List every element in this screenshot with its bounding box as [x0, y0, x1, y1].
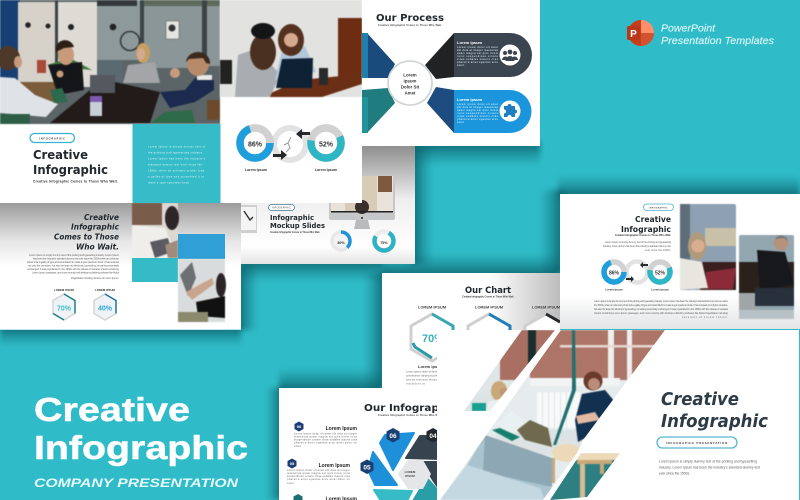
- badge: infographic: [30, 134, 74, 142]
- body text lower: the 1500s, when an unknown printer took a galley of type and scrambled it to make a type specimen book. It has survived not only five centuries,: [594, 303, 728, 307]
- body text: not only five centuries, but also the leap into electronic typesetting, remaining essentially: [28, 264, 120, 268]
- heading: infographic mockup slides: Infographic: [270, 214, 314, 222]
- process arm: blue: [427, 87, 532, 133]
- center hexagon: LOREM: [405, 470, 416, 474]
- donut chart: 30%: 30%: [337, 241, 345, 245]
- process arm: dark: [425, 33, 532, 79]
- process arm: dark: vitae sodales mauris cras: [457, 57, 499, 61]
- list item 05: suspendisse ornare vitae sodales mauris cras: [287, 474, 351, 478]
- heading: our chart: Creative Infographic Comes to Those Who Wait.: [462, 296, 514, 298]
- slide: our process: [362, 0, 540, 146]
- list item 05: pharetra amet egestas arcu amet dolor sit: [287, 477, 350, 481]
- badge: infographic presentation: INFOGRAPHIC PRESENTATION: [666, 441, 728, 445]
- chart: linked donuts: Lorem Ipsum: [651, 288, 669, 292]
- list item 05: Lorem ipsum dolor sit amet elit duis at integer: [287, 468, 350, 472]
- segment: [406, 436, 440, 459]
- list item 05: [287, 458, 351, 485]
- caption: sed do eiusmod tempor: [406, 378, 438, 382]
- process arm: blue: vitae sodales mauris cras: [457, 114, 499, 118]
- label: [661, 24, 774, 47]
- list item 06: pharetra amet egestas arcu amet dolor sit: [294, 440, 357, 444]
- slide: our infographic: [279, 388, 437, 500]
- badge: INFOGRAPHIC: [649, 206, 668, 209]
- stat: 70% hexagon: LOREM IPSUM: [54, 288, 75, 292]
- badge 05: 05: [363, 464, 371, 472]
- chart: 86% and 52% linked donuts: Lorem Ipsum: [315, 168, 337, 172]
- list item 05: 05: [290, 461, 295, 466]
- chart: 86% and 52% linked donuts: Lorem Ipsum: [245, 168, 267, 172]
- body text: ever since the 1500s.: [645, 248, 671, 252]
- icon: puzzle: [500, 100, 520, 122]
- center circle: [388, 61, 432, 105]
- list item 06: amet: [294, 444, 301, 448]
- body text: Lorem Ipsum is simply dummy text of the printing and typesetting: [659, 460, 757, 464]
- heading: our chart: Our Chart: [465, 286, 511, 296]
- body text: Lorem Ipsum is simply dummy text of the printing and typesetting: [605, 240, 672, 244]
- list item 06: maecenas quam magna est quis lorem nunc: [294, 434, 358, 438]
- heading: creative infographic: Creative: [661, 389, 739, 410]
- stat: 40% hexagon: LOREM IPSUM: [95, 288, 116, 292]
- stat: 40% hexagon: [94, 288, 116, 320]
- stat: 70% hexagon: 70%: [57, 306, 72, 312]
- list item 06: [294, 422, 358, 448]
- slide: creative infographic with team photos: [0, 0, 362, 203]
- center circle: Ipsum: [404, 78, 417, 84]
- caption: [406, 366, 437, 384]
- process arm: dark: elit duis at integer maecenas: [457, 48, 499, 52]
- heading: italic: Infographic: [71, 222, 119, 232]
- list item 05: Lorem Ipsum: [319, 463, 351, 469]
- process arm: dark: Lorem ipsum dolor sit amet: [457, 45, 498, 49]
- main title: [34, 391, 248, 490]
- label: PowerPoint: [661, 24, 716, 34]
- process arm: blue: quam magna est quis lorem: [457, 108, 498, 112]
- heading: our process: Our Process: [376, 13, 444, 24]
- photo: man seated: [739, 235, 794, 319]
- heading: Creative: [635, 215, 672, 224]
- segment: [380, 433, 414, 470]
- list item 06: Lorem Ipsum: [326, 426, 358, 432]
- icon: powerpoint logo: [627, 20, 654, 46]
- slide: creative infographic right: [560, 194, 800, 329]
- body text: PageMaker including versions of Lorem Ipsum.: [71, 276, 119, 280]
- donut chart: 75%: [371, 228, 397, 254]
- list item 04: [294, 494, 358, 500]
- heading: our infographic: [364, 404, 437, 416]
- caption: Lorem ipsum dolor sit amet: [406, 370, 438, 374]
- badge: infographic: INFOGRAPHIC: [272, 206, 291, 210]
- chart: 86% and 52% linked donuts: 52%: [319, 142, 334, 148]
- process arm: blue: amet.: [457, 120, 465, 124]
- center circle: Lorem: [403, 72, 417, 78]
- label: Presentation Templates: [661, 36, 774, 47]
- badge 04: 04: [429, 433, 437, 440]
- icon: tablet device: [241, 205, 257, 233]
- process arm: blue: elit duis at integer maecenas: [457, 105, 499, 109]
- list item 05: amet: [287, 481, 294, 485]
- chart: 86% and 52% linked donuts: [236, 123, 346, 172]
- body text: [603, 240, 672, 252]
- body text: ever since the 1500s.: [659, 472, 690, 476]
- heading: [615, 215, 672, 237]
- photo: two women with laptop: [220, 0, 362, 97]
- list item 05: maecenas quam magna est quis lorem nunc: [287, 471, 351, 475]
- panel: teal text block: 1500s, when an unknown printer took: [148, 168, 205, 172]
- body text lower: versions of Lorem Ipsum.: [682, 315, 728, 319]
- heading: infographic mockup slides: Creative Infographic Comes to Those Who Wait.: [270, 231, 320, 234]
- heading: creative infographic: Creative: [33, 148, 88, 162]
- branding: powerpoint templates: [627, 20, 774, 47]
- body text lower: sheets containing Lorem Ipsum passages, and more recently with desktop publishing software like Aldus PageMaker including: [594, 311, 729, 315]
- center circle: Dolor Sit: [401, 84, 420, 90]
- block: blue: [178, 234, 225, 259]
- segment: [413, 478, 440, 500]
- labels: LOREM IPSUM: [475, 304, 504, 310]
- slide: hero creative infographic: [437, 330, 800, 500]
- badge: infographic: [268, 204, 294, 210]
- heading: infographic mockup slides: Mockup Slides: [270, 222, 325, 230]
- body text lower: but also the leap into electronic typesetting, remaining essentially unchanged. It was popularised in the 1960s with the release of Letraset: [594, 307, 728, 311]
- body text: has been the industry's standard dummy text ever since the 1500s when an unknown: [33, 256, 120, 260]
- badge: infographic: INFOGRAPHIC: [39, 136, 66, 140]
- panel: teal text block: make a type specimen book.: [148, 180, 190, 184]
- icon: people: [500, 44, 520, 66]
- list item 06: Lorem ipsum dolor sit amet elit duis at integer: [294, 432, 357, 436]
- body text: unchanged. It was popularised in the 1960s with the release of Letraset sheets containing: [27, 267, 120, 271]
- hexagon chart: 70%: [411, 314, 453, 361]
- heading: italic: Who Wait.: [76, 242, 119, 252]
- panel: teal text block: [132, 124, 220, 203]
- chart: linked donuts: 52%: [655, 270, 666, 276]
- panel: teal text block: Lorem Ipsum is simply dummy text of: [148, 144, 205, 148]
- heading: Infographic: [621, 225, 671, 234]
- process arm: blue: nunc suspendisse ornare: [457, 111, 499, 115]
- photo piece: table and rug: [550, 453, 620, 500]
- process arm: blue: Lorem Ipsum: [457, 97, 483, 102]
- body text lower: Lorem Ipsum is simply dummy text of the printing and typesetting industry. Lorem Ipsum has been the industry's standard dummy text ever since: [594, 299, 729, 303]
- heading: creative infographic: Infographic: [33, 163, 108, 177]
- panel: teal text block: the printing and typesetting industry.: [148, 150, 203, 154]
- labels: LOREM IPSUM: [532, 304, 561, 310]
- photo: meeting room: [0, 0, 220, 124]
- panel: teal text block: a galley of type and scrambled it to: [148, 174, 205, 178]
- slide: creative infographic comes to those who wait: [0, 203, 241, 330]
- icon: desktop monitor: [329, 176, 395, 229]
- photo: laptop on table: [178, 259, 226, 322]
- segment: [424, 461, 437, 488]
- heading: italic: Creative: [84, 213, 120, 222]
- panel: teal text block: standard dummy text ever since the: [148, 162, 203, 166]
- slide: mockup: [241, 146, 415, 264]
- body text: industry. Lorem Ipsum has been the industry's standard dummy text: [603, 244, 671, 248]
- heading: infographic mockup slides: [270, 214, 325, 234]
- body text: printer took a galley of type and scrambled it to make a type specimen book. It has survived: [27, 260, 120, 264]
- labels: [418, 306, 560, 308]
- process arm: dark: quam magna est quis lorem: [457, 51, 498, 55]
- photo: laptop desk: [132, 203, 179, 258]
- donut chart: 75%: 75%: [380, 241, 388, 245]
- segment: [374, 490, 412, 500]
- slide: our chart: [382, 273, 567, 390]
- list item 06: suspendisse ornare vitae sodales mauris cras: [294, 438, 358, 442]
- process arm: dark: nunc suspendisse ornare: [457, 54, 499, 58]
- heading: italic: Comes to Those: [54, 232, 120, 242]
- list item 06: 06: [297, 424, 302, 429]
- heading: our infographic: Creative Infographic Comes to Those Who Wait.: [378, 414, 442, 417]
- heading: creative infographic: [33, 148, 118, 184]
- subtitle: COMPANY PRESENTATION: [34, 478, 239, 490]
- photo: woman on sofa: [680, 204, 736, 290]
- chart: linked donuts: 86%: [609, 270, 620, 276]
- heading: creative infographic: [661, 389, 768, 432]
- center hexagon: [398, 460, 431, 489]
- chart: linked donuts: [604, 259, 673, 292]
- stat: 40% hexagon: 40%: [98, 306, 113, 312]
- body text: [27, 253, 120, 280]
- hexagon chart: second: [466, 312, 512, 330]
- heading: Creative Infographic Comes to Those Who Wait.: [615, 234, 671, 237]
- slide shadows: [0, 142, 800, 500]
- badge 06: 06: [389, 433, 397, 440]
- hexagon chart: 70%: 70%: [422, 333, 444, 345]
- main title: Infographic: [34, 429, 248, 466]
- photo piece: main scene: [440, 330, 670, 500]
- wheel diagram: [360, 428, 440, 500]
- panel: teal text block: Lorem Ipsum has been the industry's: [148, 156, 206, 160]
- main title: Creative: [34, 391, 190, 428]
- body text: Lorem Ipsum passages, and more recently with desktop publishing software like Aldus: [32, 270, 120, 274]
- body text lower: [594, 299, 729, 319]
- photo piece: woman with blond hair: [464, 330, 555, 411]
- labels: LOREM IPSUM: [418, 304, 447, 310]
- stat: 70% hexagon: [53, 288, 75, 320]
- donut chart: 30%: [331, 231, 351, 251]
- body text: Lorem Ipsum is simply dummy text of the printing and typesetting industry. Lorem Ipsum: [29, 253, 119, 257]
- body text: [659, 460, 760, 476]
- center circle: Amet: [405, 90, 416, 96]
- badge: infographic presentation: [657, 437, 737, 448]
- badge: [644, 204, 674, 210]
- center hexagon: IPSUM: [405, 474, 415, 478]
- chart: linked donuts: Lorem Ipsum: [605, 288, 623, 292]
- hexagon chart: third: [524, 312, 560, 330]
- chart: 86% and 52% linked donuts: 86%: [248, 142, 263, 148]
- block: teal: [132, 258, 178, 282]
- segment: [368, 452, 397, 485]
- heading: our infographic: Our Infographic: [364, 403, 456, 414]
- process arm: blue: Lorem ipsum dolor sit amet: [457, 102, 498, 106]
- icon: powerpoint logo: P: [630, 29, 637, 40]
- process arm: blue: pharetra amet egestas arcu: [457, 117, 499, 121]
- process arm: dark: Lorem Ipsum: [457, 40, 483, 45]
- heading: italic: [54, 213, 120, 252]
- heading: creative infographic: Creative Infographic Comes to Those Who Wait.: [33, 180, 118, 184]
- caption: Lorem Ipsum: [418, 364, 444, 369]
- caption: consectetur adipiscing elit: [406, 374, 438, 378]
- heading: creative infographic: Infographic: [661, 411, 768, 432]
- heading: our process: Creative Infographic Comes to Those Who Wait.: [378, 24, 442, 27]
- left arms: [362, 33, 395, 133]
- body text: industry. Lorem Ipsum has been the industry's standard dummy text: [659, 466, 760, 470]
- caption: incididunt ut.: [406, 382, 426, 386]
- process arm: dark: pharetra amet egestas arcu: [457, 60, 499, 64]
- process arm: dark: amet.: [457, 63, 465, 67]
